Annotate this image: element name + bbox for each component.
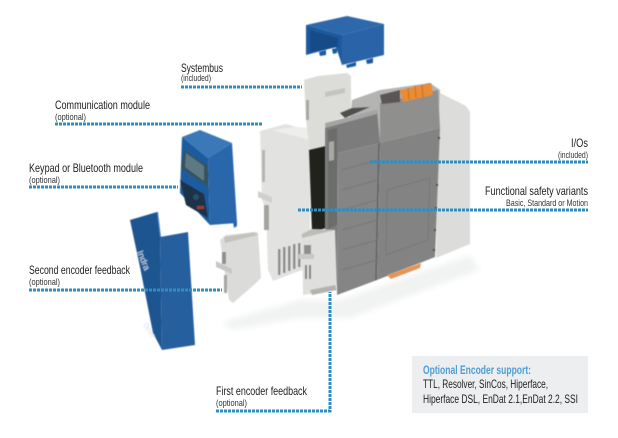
panel: optional encoder support bbox=[412, 356, 588, 413]
second encoder module bbox=[216, 232, 261, 303]
label: Functional safety variants: Basic, Standard or Motion bbox=[506, 198, 588, 209]
icon: top connectors bbox=[380, 83, 433, 104]
gray drive body bbox=[325, 83, 440, 295]
label: Systembus: Systembus bbox=[181, 61, 223, 75]
icon: blue front door: Indra bbox=[135, 249, 152, 272]
panel: optional encoder support: TTL, Resolver, SinCos, Hiperface, bbox=[423, 377, 548, 391]
communication module bbox=[258, 124, 310, 281]
label: Functional safety variants bbox=[298, 184, 588, 210]
icon: keypad or Bluetooth module bbox=[180, 130, 237, 228]
label: Second encoder feedback: Second encoder feedback bbox=[29, 263, 131, 277]
label: Systembus bbox=[181, 61, 302, 87]
label: Keypad or Bluetooth module bbox=[29, 161, 178, 187]
label: Functional safety variants: Functional safety variants bbox=[485, 184, 588, 198]
icon: blue top cover bbox=[306, 16, 384, 68]
label: Second encoder feedback bbox=[29, 263, 222, 290]
floor shadow bbox=[222, 255, 480, 330]
label: First encoder feedback: First encoder feedback bbox=[216, 384, 308, 398]
icon: blue front door: Drive bbox=[141, 322, 157, 340]
icon: blue front door bbox=[130, 212, 195, 350]
label: Keypad or Bluetooth module: (optional) bbox=[29, 175, 60, 186]
label: Second encoder feedback: (optional) bbox=[29, 277, 60, 288]
dark interior of drive bbox=[309, 146, 326, 233]
label: First encoder feedback: (optional) bbox=[216, 398, 247, 409]
first encoder module bbox=[298, 229, 337, 295]
right heat sink panel bbox=[436, 92, 470, 258]
label: Keypad or Bluetooth module: Keypad or Bluetooth module bbox=[29, 161, 143, 175]
systembus module bbox=[304, 73, 351, 155]
label: First encoder feedback bbox=[216, 292, 330, 411]
label: I/Os bbox=[370, 136, 588, 162]
label: Communication module: Communication module bbox=[55, 98, 150, 112]
icon: orange bottom connector bbox=[387, 263, 421, 279]
label: I/Os: (included) bbox=[558, 150, 588, 161]
label: Systembus: (included) bbox=[181, 73, 211, 84]
label: Communication module: (optional) bbox=[55, 112, 86, 123]
panel: optional encoder support: Optional Encoder support: bbox=[423, 363, 531, 377]
label: I/Os: I/Os bbox=[571, 136, 588, 150]
label: Communication module bbox=[55, 98, 262, 124]
